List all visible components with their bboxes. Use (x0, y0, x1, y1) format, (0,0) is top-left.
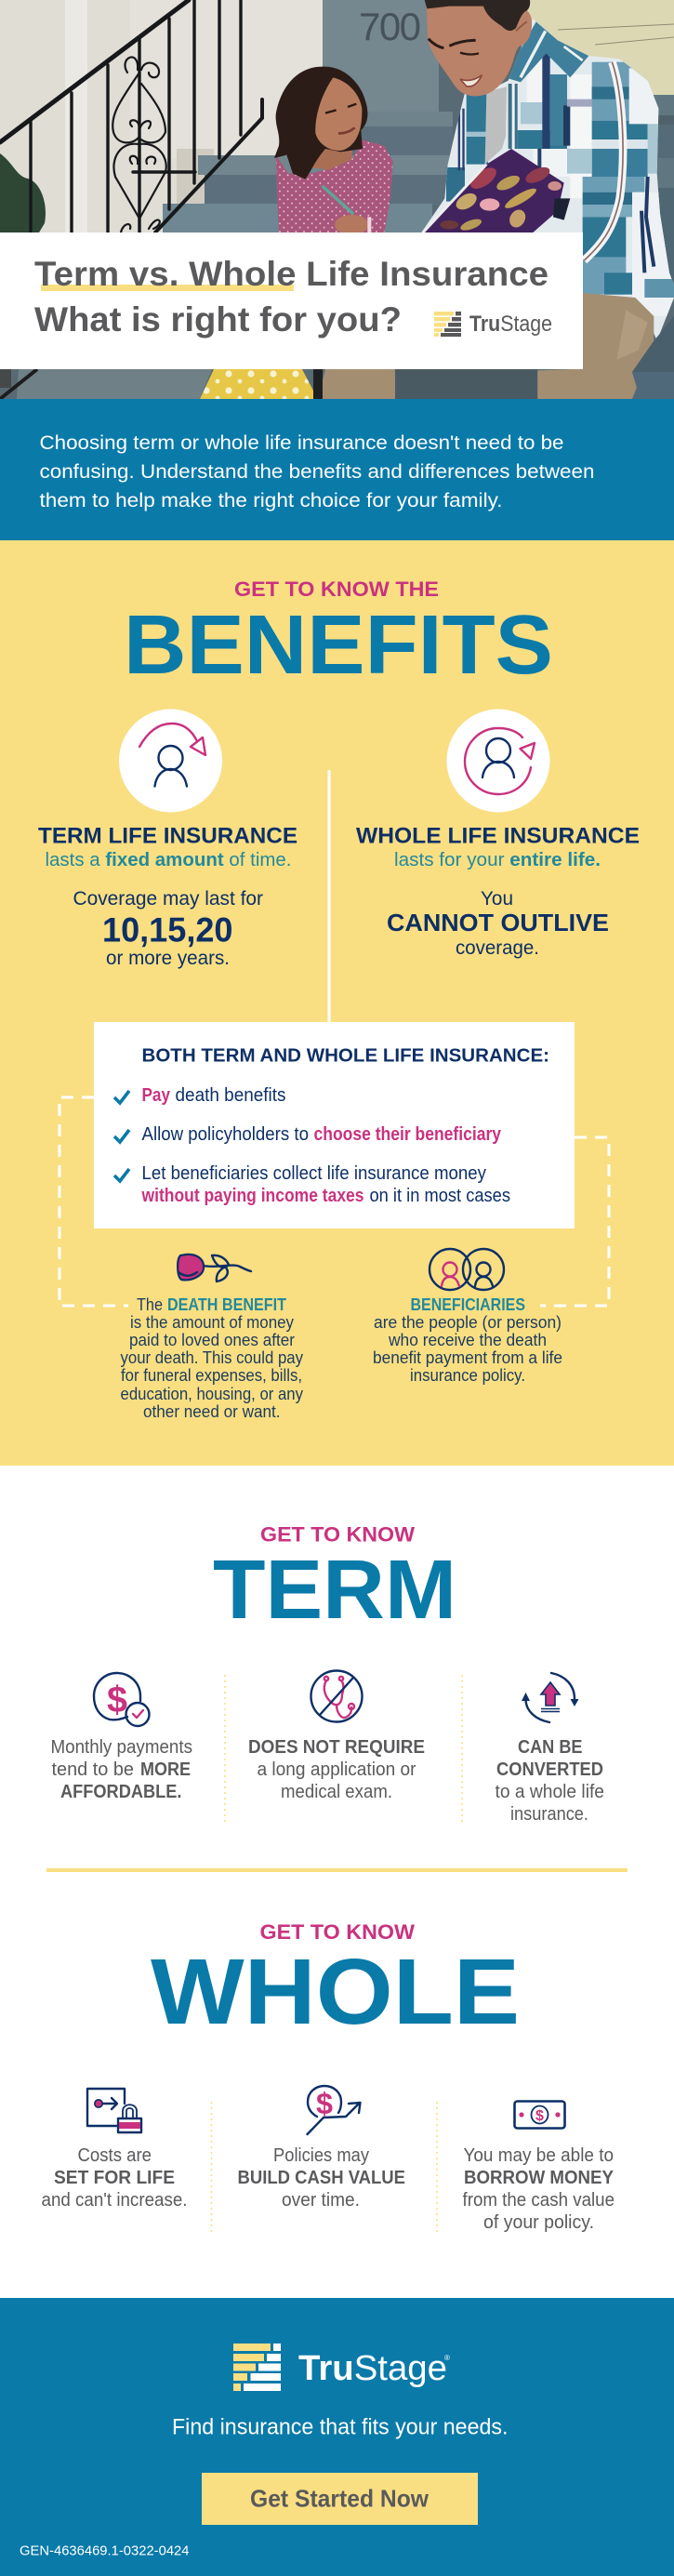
column: can be converted: insurance. (510, 1804, 588, 1825)
intro band (0, 399, 674, 540)
column: does not require (248, 1737, 425, 1802)
button: get started now: Get Started Now (250, 2485, 430, 2513)
column: term life insurance: Coverage may last for (73, 888, 263, 910)
dashed connector right (540, 1137, 609, 1306)
heading: benefits: BENEFITS (124, 599, 553, 692)
column: borrow money: from the cash value (463, 2190, 615, 2211)
death benefit text: other need or want. (143, 1402, 281, 1421)
icon: beneficiaries (430, 1249, 504, 1290)
eyebrow: get to know: GET TO KNOW (260, 1523, 415, 1546)
title line 2: What is right for you? (34, 300, 402, 339)
footer tagline: Find insurance that fits your needs. (172, 2414, 508, 2440)
small TruStage logo (434, 312, 552, 337)
intro text: confusing. Understand the benefits and differences between (39, 460, 595, 483)
column: more affordable (50, 1737, 192, 1802)
intro text (39, 432, 595, 511)
dashed connector left (59, 1097, 128, 1306)
column: does not require: a long application or (257, 1759, 416, 1780)
iron railing (0, 0, 262, 232)
dotted divider (436, 2102, 438, 2235)
column: can be converted: CAN BE (518, 1737, 582, 1758)
cream siding wall (525, 0, 674, 95)
checklist item: pay: Pay (141, 1085, 171, 1106)
checklist item: income taxes: Let beneficiaries collect life insurance money (141, 1163, 486, 1184)
column: can be converted (495, 1737, 604, 1825)
heading: term: TERM (213, 1544, 456, 1637)
column: borrow money: You may be able to (463, 2145, 614, 2166)
icon: dollar check: $ (107, 1680, 127, 1720)
death benefit text: is the amount of money (130, 1313, 294, 1332)
title panel (0, 232, 583, 369)
beneficiaries text: are the people (or person) (374, 1313, 562, 1332)
icon: conversion arrows (522, 1673, 578, 1722)
column: can be converted: CONVERTED (496, 1759, 603, 1780)
column: whole life insurance: CANNOT OUTLIVE (387, 909, 609, 936)
hero photo: father and daughter on steps (0, 0, 674, 399)
right steps (654, 95, 674, 285)
beneficiaries text: BENEFICIARIES (411, 1295, 525, 1314)
column: borrow money: of your policy. (483, 2212, 594, 2233)
column: whole life insurance (356, 824, 640, 959)
button: get started now (202, 2473, 478, 2525)
column: more affordable: Monthly payments (50, 1737, 192, 1758)
icon: term life person with partial arc (119, 709, 222, 813)
icon: banknote (515, 2102, 565, 2128)
yellow section rule (46, 1868, 628, 1872)
death benefit text: DEATH BENEFIT (167, 1295, 286, 1314)
death benefit text: your death. This could pay (121, 1348, 303, 1367)
column: whole life insurance: You (481, 888, 513, 910)
man (409, 0, 674, 347)
beneficiaries text: benefit payment from a life (373, 1348, 562, 1367)
icon: stethoscope crossed out (311, 1670, 363, 1722)
checklist item: beneficiary: choose their beneficiary (314, 1124, 502, 1145)
panel: both term and whole (94, 1022, 575, 1228)
icon: whole life person with full arc (446, 709, 550, 813)
dotted divider (461, 1675, 463, 1822)
checklist item: pay: death benefits (175, 1085, 286, 1106)
backpack (200, 369, 313, 399)
left pants leg (318, 369, 395, 399)
title line 1: Term vs. Whole Life Insurance (34, 255, 548, 293)
column: build cash value: Policies may (273, 2145, 369, 2166)
column: borrow money (463, 2145, 615, 2233)
panel: get to know term (50, 1523, 604, 1825)
column: whole life insurance: coverage. (456, 937, 539, 959)
column: term life insurance: lasts a fixed amount of time. (45, 850, 292, 870)
centre divider (327, 770, 331, 1022)
column: more affordable: AFFORDABLE. (60, 1782, 182, 1802)
column: does not require: medical exam. (281, 1782, 392, 1802)
eyebrow: get to know: GET TO KNOW (260, 1920, 415, 1944)
khaki pants (537, 293, 654, 399)
column: does not require: DOES NOT REQUIRE (248, 1737, 425, 1758)
column: set for life (41, 2145, 188, 2211)
column: borrow money: BORROW MONEY (464, 2168, 615, 2188)
notebook (423, 149, 570, 232)
checklist item: pay (114, 1085, 286, 1106)
beneficiaries text: who receive the death (388, 1331, 547, 1349)
intro text: them to help make the right choice for your family. (39, 489, 502, 511)
column: set for life: SET FOR LIFE (54, 2168, 175, 2188)
document code: GEN-4636469.1-0322-0424 (20, 2543, 190, 2559)
TruStage logo (233, 2344, 450, 2391)
column: more affordable: tend to be (52, 1759, 134, 1780)
heading: whole: WHOLE (151, 1940, 520, 2044)
stucco wall (0, 0, 323, 232)
icon: dollar check (94, 1673, 149, 1726)
eyebrow: get to know the: GET TO KNOW THE (234, 578, 439, 601)
icon: locked rate (87, 2089, 141, 2132)
beneficiaries text: insurance policy. (410, 1366, 525, 1385)
death benefit text (121, 1295, 303, 1421)
panel: get to know whole (41, 1920, 615, 2235)
beneficiaries text (373, 1295, 562, 1385)
icon: cash value growth (307, 2086, 361, 2134)
column: build cash value (238, 2145, 405, 2211)
checklist item: income taxes: without paying income taxes (141, 1186, 364, 1206)
column: whole life insurance: WHOLE LIFE INSURANCE (356, 824, 640, 848)
head (426, 0, 532, 96)
icon: rose (178, 1255, 251, 1281)
small TruStage logo: TruStage (469, 312, 552, 337)
door (323, 0, 439, 113)
icon: cash value growth: $ (316, 2087, 333, 2120)
TruStage logo: TruStage (298, 2349, 447, 2388)
checklist item: beneficiary (114, 1124, 502, 1145)
column: whole life insurance: lasts for your entire life. (394, 850, 601, 870)
dotted divider (224, 1675, 226, 1822)
grey t-shirt (485, 86, 507, 165)
column: more affordable: MORE (140, 1759, 191, 1780)
death benefit text: for funeral expenses, bills, (121, 1366, 302, 1385)
grey steps (163, 112, 453, 232)
column: term life insurance (38, 824, 297, 969)
column: set for life: Costs are (78, 2145, 152, 2166)
checklist item: income taxes (114, 1163, 510, 1206)
door number: 700 (359, 5, 421, 48)
death benefit text: The (137, 1295, 163, 1314)
panel: benefits (0, 540, 674, 1466)
column: build cash value: BUILD CASH VALUE (238, 2168, 405, 2188)
dotted divider (210, 2102, 212, 2235)
icon: banknote: $ (535, 2108, 544, 2124)
column: build cash value: over time. (282, 2190, 360, 2211)
girl (274, 67, 393, 234)
footer band (0, 2298, 674, 2576)
checklist item: beneficiary: Allow policyholders to (141, 1124, 309, 1145)
TruStage logo: ® (444, 2354, 450, 2362)
both heading: BOTH TERM AND WHOLE LIFE INSURANCE: (141, 1045, 549, 1066)
checklist item: income taxes: on it in most cases (370, 1186, 510, 1206)
shrub (0, 153, 46, 232)
front step (0, 316, 674, 399)
column: term life insurance: 10,15,20 (102, 911, 232, 949)
death benefit text: paid to loved ones after (129, 1331, 295, 1349)
column: can be converted: to a whole life (495, 1782, 604, 1802)
intro text: Choosing term or whole life insurance doesn't need to be (39, 432, 563, 454)
death benefit text: education, housing, or any (121, 1385, 303, 1403)
column: term life insurance: or more years. (106, 948, 230, 969)
plaid shirt (422, 19, 674, 339)
column: set for life: and can't increase. (41, 2190, 188, 2211)
title underline highlight (41, 285, 294, 291)
column: term life insurance: TERM LIFE INSURANCE (38, 824, 297, 848)
